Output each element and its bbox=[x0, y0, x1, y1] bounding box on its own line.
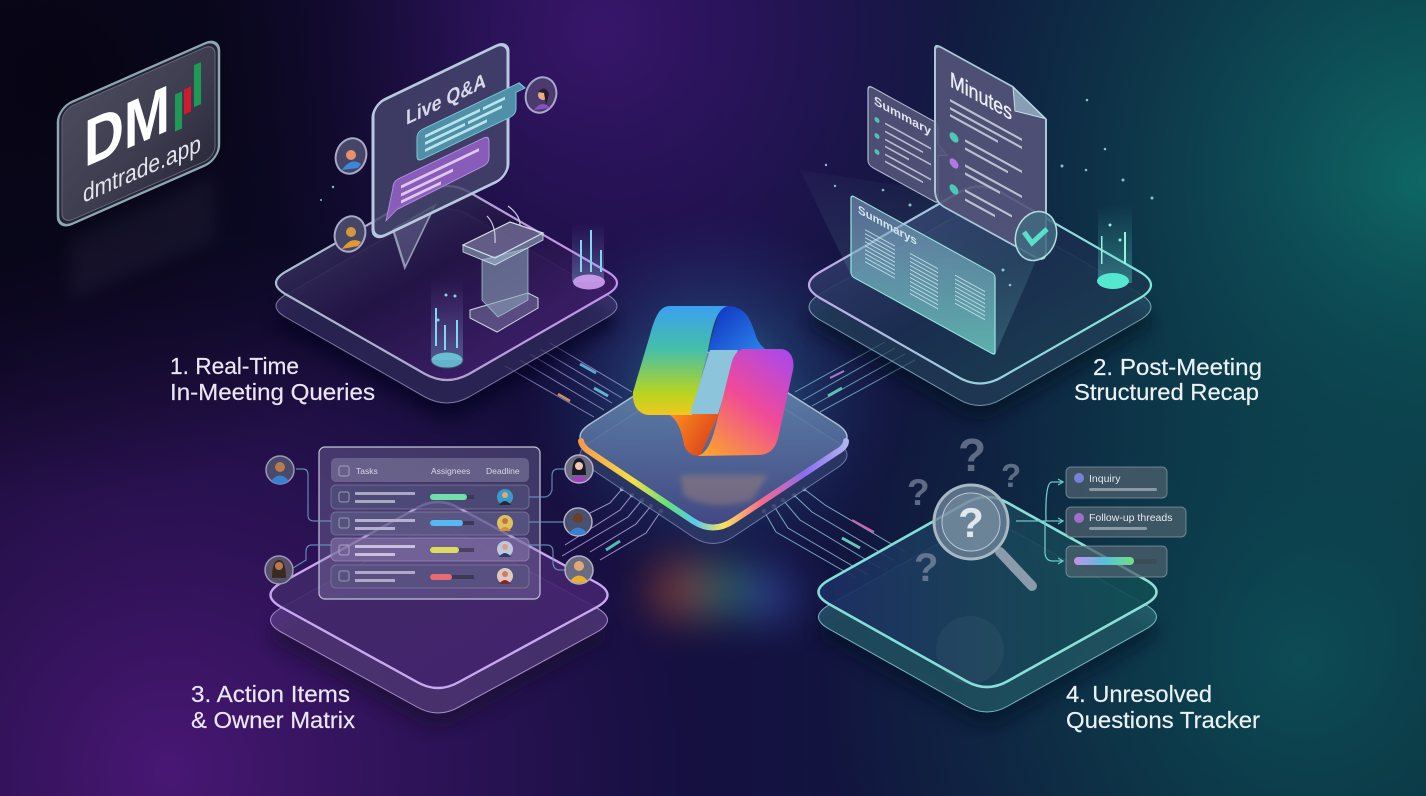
question marks bbox=[907, 429, 1021, 590]
question marks: ? bbox=[1001, 457, 1021, 494]
assignee avatars bbox=[265, 455, 593, 584]
lectern top bbox=[463, 222, 543, 258]
Summarys panel: Summarys bbox=[858, 203, 917, 248]
Live Q&A title: Live Q&A bbox=[406, 68, 486, 130]
folded corner bbox=[1013, 87, 1045, 128]
Minutes title: Minutes bbox=[950, 67, 1012, 125]
question marks: ? bbox=[914, 546, 938, 590]
logo: right ribbon bbox=[698, 349, 793, 456]
label 1: real-time in-meeting queries: In-Meeting Queries bbox=[170, 379, 375, 405]
avatar: user left bbox=[331, 134, 371, 178]
data pillar: platform 1 right bbox=[572, 222, 605, 290]
platform 4: questions bbox=[818, 497, 1156, 727]
question marks: ? bbox=[907, 472, 930, 513]
lectern base bbox=[470, 293, 538, 332]
label 3: action items and owner matrix bbox=[191, 681, 355, 733]
avatar: man right bbox=[564, 508, 592, 536]
label 4: unresolved questions tracker bbox=[1066, 681, 1260, 733]
logo URL: dmtrade.app bbox=[83, 128, 201, 209]
platform 2: recap bbox=[809, 186, 1151, 420]
logo card reflection bbox=[70, 175, 215, 300]
row 1 bbox=[331, 485, 529, 509]
table header: Deadline bbox=[486, 466, 520, 476]
connectors: top right bbox=[795, 342, 915, 412]
platform 1: real-time queries bbox=[276, 186, 617, 418]
logo: blue fold bbox=[708, 306, 767, 352]
sparkle particles bbox=[320, 99, 1154, 286]
card: inquiry: Inquiry bbox=[1089, 473, 1121, 485]
logo: light-blue overlap bbox=[690, 350, 738, 414]
connector lines to centre hub bbox=[505, 342, 915, 578]
label 2: post-meeting structured recap: 2. Post-Meeting bbox=[1093, 354, 1262, 380]
logo: orange fold bbox=[668, 412, 720, 456]
card: follow-up threads bbox=[1066, 507, 1186, 537]
avatar: woman lower left bbox=[265, 556, 293, 584]
lectern column bbox=[482, 248, 528, 317]
Summarys panel bbox=[851, 195, 995, 355]
brand logo card bbox=[58, 37, 219, 300]
check badge bbox=[1009, 206, 1063, 266]
question marks: ? bbox=[958, 429, 986, 481]
platform 3: action items bbox=[270, 502, 608, 728]
avatar: user lower left bbox=[330, 212, 370, 256]
row 4 bbox=[331, 565, 529, 588]
label 4: unresolved questions tracker: Questions Tracker bbox=[1066, 707, 1260, 733]
Summary panel: Summary bbox=[874, 93, 931, 139]
copilot logo bbox=[633, 306, 793, 456]
projection light beam bbox=[800, 170, 1045, 355]
lectern bbox=[463, 206, 543, 332]
connectors: bottom left bbox=[562, 487, 663, 560]
task table panel bbox=[319, 447, 540, 599]
avatar: man top left bbox=[266, 456, 294, 484]
speech bubble tail bbox=[393, 205, 435, 273]
label 2: post-meeting structured recap bbox=[1074, 354, 1262, 405]
teal chat bubble bbox=[417, 80, 525, 162]
avatar: woman top right bbox=[565, 455, 593, 483]
table header bbox=[331, 458, 529, 482]
table header: Assignees bbox=[431, 466, 470, 476]
candlestick icon bbox=[175, 62, 201, 132]
card: progress bar bbox=[1066, 546, 1167, 577]
table header: Tasks bbox=[356, 466, 378, 476]
hub reflection glow bbox=[648, 558, 796, 625]
microphones bbox=[487, 206, 520, 243]
card: inquiry bbox=[1066, 467, 1167, 498]
logo reflection bbox=[680, 475, 768, 505]
purple chat bubble bbox=[386, 135, 489, 221]
label 1: real-time in-meeting queries bbox=[170, 353, 375, 405]
magnifier reflection bbox=[936, 616, 1004, 684]
branch arrows bbox=[1016, 479, 1063, 564]
avatar: man lower right bbox=[565, 556, 593, 584]
label 2: post-meeting structured recap: Structured Recap bbox=[1074, 379, 1259, 405]
live Q&A speech panel bbox=[330, 32, 561, 283]
magnifying glass icon bbox=[934, 485, 1032, 586]
data pillar: platform 2 bbox=[1097, 205, 1132, 289]
magnifier handle bbox=[1000, 552, 1032, 586]
label 1: real-time in-meeting queries: 1. Real-Time bbox=[170, 353, 299, 379]
DM wordmark: DM bbox=[84, 70, 170, 182]
rainbow rim bbox=[581, 441, 846, 528]
avatar: user top right bbox=[521, 73, 561, 117]
row 3 bbox=[331, 538, 529, 561]
label 3: action items and owner matrix: 3. Action Items bbox=[191, 681, 350, 707]
logo: left ribbon bbox=[633, 306, 728, 415]
label 3: action items and owner matrix: & Owner Matrix bbox=[191, 707, 355, 733]
connectors: top left bbox=[505, 343, 632, 417]
central hub platform bbox=[580, 352, 847, 544]
magnifying glass icon: ? bbox=[958, 499, 984, 546]
assignee connector lines bbox=[293, 469, 565, 570]
Summary panel bbox=[868, 85, 947, 208]
card: follow-up threads: Follow-up threads bbox=[1089, 512, 1172, 524]
data pillar: platform 1 left bbox=[431, 278, 463, 368]
Minutes document bbox=[935, 44, 1063, 266]
label 4: unresolved questions tracker: 4. Unresolved bbox=[1066, 681, 1212, 707]
row 2 bbox=[331, 512, 529, 535]
connectors: bottom right bbox=[762, 487, 905, 578]
